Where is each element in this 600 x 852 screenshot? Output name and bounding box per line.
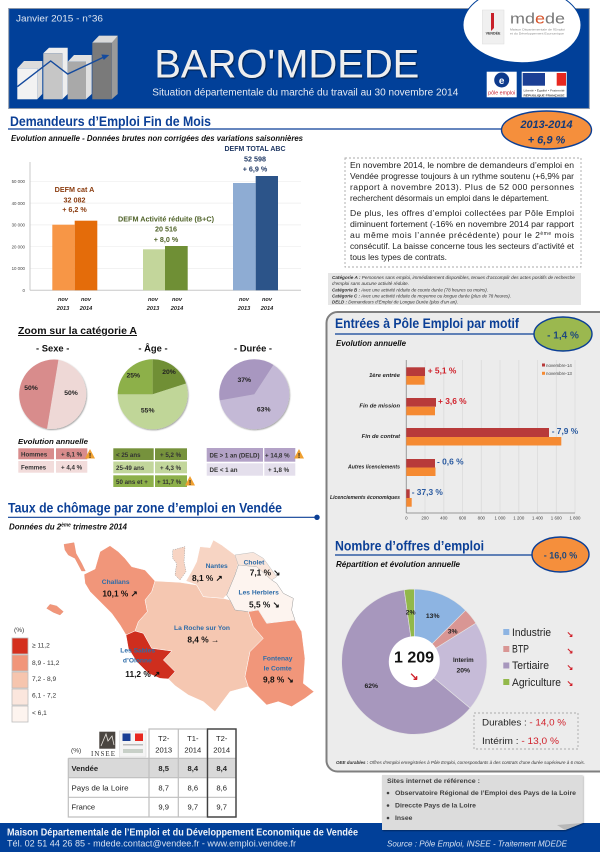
text box: commentary: au même mois l’année précédente) pour le 2: [350, 230, 540, 240]
pie: duree: 37%: [237, 377, 251, 384]
table: national comparison: 8,7: [158, 783, 169, 792]
bar chart: DEFM: nov: [239, 297, 250, 303]
bar chart: entrees par motif: - 7,9 %: [552, 426, 579, 436]
region: Challans: Challans: [102, 579, 130, 586]
panel: sites internet: Direccte Pays de la Loire: [395, 803, 476, 810]
label: DEFM activite reduite: DEFM Activité réduite (B+C): [118, 215, 215, 224]
label: DEFM cat A: 32 082: [64, 195, 85, 204]
callout: 2013-2014 +6,9 %: + 6,9 %: [528, 134, 566, 146]
bar chart: entrees par motif: Licenciements économiques: [330, 495, 401, 501]
region: La Roche sur Yon: 8,4 % →: [187, 634, 219, 644]
bar chart: entrees par motif: 600: [459, 516, 467, 520]
panel: sites internet: [382, 775, 583, 830]
table: national comparison: 9,9: [158, 803, 169, 812]
table: age evolution: + 5,2 %: [160, 452, 182, 459]
label: DEFM activite reduite: + 8,0 %: [154, 235, 179, 244]
callout: 2013-2014 +6,9 %: 2013-2014: [520, 119, 572, 131]
bar chart: entrees par motif: + 3,6 %: [438, 396, 467, 406]
table: duree evolution: DE < 1 an: [210, 467, 238, 474]
donut chart: offres: [342, 589, 487, 734]
legend: secteurs: Tertiaire: [512, 660, 549, 672]
region: Fontenay le Comte: le Comte: [264, 666, 292, 673]
bar chart: entrees par motif: - 37,3 %: [412, 487, 443, 497]
donut chart: offres: 2%: [406, 610, 416, 617]
heading: entrees pole emploi: Entrées à Pôle Emploi par motif: [335, 316, 519, 331]
table: duree evolution: DE > 1 an (DELD): [210, 452, 260, 459]
region: Challans: 10,1 % ↗: [102, 589, 138, 599]
bar chart: DEFM: nov: [81, 297, 92, 303]
map legend: 8,9 - 11,2: [32, 660, 60, 667]
bar chart: entrees par motif: 0: [405, 516, 408, 520]
callout: 2013-2014 +6,9 %: [502, 111, 592, 149]
region: Fontenay le Comte: 9,8 % ↘: [263, 675, 294, 685]
bar chart: DEFM: 30 000: [12, 222, 26, 228]
pie: duree: - Durée -: [234, 343, 272, 354]
label: evolution annuelle: Evolution annuelle: [18, 437, 89, 446]
bar chart: DEFM: 40 000: [12, 201, 26, 206]
logo: mdede oval: et du Développement Economique: [510, 31, 564, 35]
table: national comparison: France: [72, 803, 95, 812]
pie: sexe: - Sexe -: [36, 343, 69, 354]
table: national comparison: Pays de la Loire: [72, 783, 128, 792]
bar chart: DEFM: 2014: [170, 306, 184, 312]
callout: -1,4 %: [534, 317, 592, 351]
heading: taux de chomage: Taux de chômage par zone d’emploi en Vendée: [8, 500, 282, 515]
bar chart: entrees par motif: 200: [421, 516, 429, 520]
subheading: Evolution annuelle - Données brutes non corrigées des variations saisonnières: [11, 133, 303, 143]
heading: offres d'emploi: Nombre d’offres d’emploi: [335, 539, 484, 554]
text box: commentary: [345, 158, 581, 267]
bar chart: entrees par motif: Fin de mission: [359, 404, 400, 410]
pie: sexe: 50%: [24, 385, 38, 392]
definitions box: d’emploi sans aucune activité réduite.: [332, 281, 409, 286]
table: national comparison: 8,4: [188, 764, 199, 773]
logo: pole emploi: pôle emploi: [488, 91, 515, 97]
text box: commentary: mois: [552, 230, 574, 240]
table: age evolution: 50 ans et +: [116, 479, 148, 486]
bar chart: DEFM: 2013: [237, 306, 251, 312]
definitions box: Catégorie C : Avec une activité réduite de moyenne ou longue durée (plus de 78 heures).: [332, 294, 511, 298]
donut chart: offres: 3%: [448, 628, 458, 635]
logo: mdede oval: VENDÉE: [486, 30, 501, 35]
note: OEE durables: OEE durables : Offres d’emploi enregistrées à Pôle Emploi, correspondants à des contrats d’une durée supérieure à 6 mois.: [336, 760, 585, 765]
text box: commentary: En novembre 2014, le nombre de demandeurs d’emploi en: [350, 160, 574, 170]
subtitle: Situation départementale du marché du travail au 30 novembre 2014: [152, 88, 459, 99]
bar chart: DEFM: [12, 144, 301, 312]
table: national comparison: 8,5: [158, 764, 170, 773]
bar chart: DEFM: 20 000: [12, 244, 26, 250]
pie: age: 20%: [162, 369, 176, 376]
table: sexe evolution: Femmes: [21, 464, 47, 472]
definitions box: Catégorie A : Personnes sans emploi, immédiatement disponibles, tenues d’accomplir des actes positifs de recherche: [332, 275, 575, 280]
table: age evolution: 25-49 ans: [116, 465, 145, 472]
bar chart: entrees par motif: 1 400: [532, 516, 544, 520]
panel: right background: [326, 312, 600, 772]
bar chart: DEFM: nov: [262, 297, 273, 303]
label: DEFM activite reduite: 20 516: [155, 225, 177, 234]
definitions box: DELD : Demandeurs d’Emploi de Longue Durée (plus d’un an).: [332, 300, 458, 304]
callout: durables interim: [474, 713, 578, 749]
table: national comparison: (%): [71, 748, 81, 755]
icon: warning: !: [298, 453, 300, 460]
bar chart: DEFM: 10 000: [12, 266, 26, 271]
pie: duree: [219, 343, 289, 429]
text box: commentary: Vendée progresse toujours à un rythme soutenu (+6,9% par: [350, 171, 574, 181]
map legend: 6,1 - 7,2: [32, 692, 57, 700]
pie: age: [118, 343, 188, 429]
callout: durables interim: Intérim : - 13,0 %: [482, 736, 559, 747]
bar chart: entrees par motif: 1 600: [551, 516, 562, 520]
bar chart: entrees par motif: + 5,1 %: [428, 365, 457, 375]
region: iles: [47, 543, 85, 615]
donut chart: offres: 1 209: [394, 650, 434, 667]
legend: secteurs: ↘: [567, 630, 573, 639]
title: BARO'MDEDE: [154, 42, 419, 86]
icon: warning: !: [189, 480, 191, 487]
subheading: trimestre: ème: [61, 523, 71, 529]
bar chart: entrees par motif: Autres licenciements: [347, 464, 401, 470]
bar chart: entrees par motif: [330, 360, 581, 520]
region: Les Sables d'Olonne: 11,2 % ↗: [125, 669, 160, 679]
table: national comparison: 9,7: [216, 803, 227, 812]
heading: demandeurs d'emploi: Demandeurs d’Emploi Fin de Mois: [10, 114, 211, 129]
bar chart: entrees par motif: 1 800: [570, 516, 581, 520]
legend: secteurs: Industrie: [512, 627, 551, 639]
callout: -1,4 %: - 1,4 %: [547, 330, 579, 342]
bar chart: entrees par motif: 800: [478, 516, 486, 520]
map legend: ≥ 11,2: [32, 643, 50, 650]
legend: secteurs: ↘: [567, 679, 573, 688]
subheading: trimestre: Données du 2: [9, 522, 64, 532]
region: Nantes: Nantes: [206, 563, 228, 570]
logo: mdede oval: mdede: [510, 10, 565, 27]
region: Les Herbiers: Les Herbiers: [239, 589, 279, 596]
icon: rising bar chart: [17, 36, 118, 99]
text box: commentary: consécutif. La baisse concerne tous les secteurs d’activité et: [350, 241, 575, 251]
footer band: Tél. 02 51 44 26 85 - mdede.contact@vendee.fr - www.emploi.vendee.fr: [7, 838, 296, 848]
pie: duree: 63%: [257, 406, 271, 413]
table: sexe evolution: + 8,1 %: [61, 452, 83, 458]
footer band: [0, 823, 600, 852]
table: duree evolution: + 14,8 %: [265, 452, 290, 459]
table: national comparison: 8,6: [216, 783, 227, 792]
table: national comparison: 2013: [155, 745, 172, 754]
bar chart: DEFM: nov: [172, 297, 183, 303]
text box: commentary: rapport à novembre 2013). Plus de 52 000 personnes: [350, 182, 574, 192]
table: age evolution: + 4,3 %: [160, 465, 182, 472]
donut chart: offres: 62%: [364, 683, 378, 690]
subheading: trimestre: trimestre 2014: [71, 522, 127, 532]
bar chart: DEFM: nov: [58, 297, 69, 303]
bar chart: DEFM: 0: [23, 288, 26, 293]
region: Challans: [84, 546, 155, 635]
text box: commentary: diminuent fortement (-16% en novembre 2014 par rapport: [350, 219, 575, 229]
label: DEFM total: + 6,9 %: [243, 164, 268, 174]
bar chart: entrees par motif: 1 000: [494, 516, 506, 520]
logo: INSEE: [91, 732, 115, 758]
legend: secteurs: ↘: [567, 646, 573, 656]
bar chart: DEFM: 2014: [79, 306, 93, 312]
logo: republique francaise: Liberté • Égalité • Fraternité: [524, 88, 565, 93]
bar chart: DEFM: 2013: [146, 306, 160, 312]
legend: secteurs: BTP: [512, 644, 529, 656]
bar chart: entrees par motif: Fin de contrat: [362, 434, 401, 440]
logo: INSEE: INSEE: [91, 750, 115, 758]
label: DEFM activite reduite: [118, 215, 215, 244]
pie: sexe: 50%: [64, 390, 78, 397]
panel: sites internet: Insee: [395, 815, 413, 822]
chart legend: [542, 363, 572, 376]
bar chart: DEFM: 2014: [260, 306, 274, 312]
table: national comparison: 2014: [213, 745, 230, 754]
table: national comparison: Vendée: [72, 764, 98, 773]
region: Cholet: [235, 552, 280, 580]
region: Les Sables d'Olonne: d’Olonne: [123, 658, 152, 665]
map: Vendee: [47, 540, 314, 712]
table: sexe evolution: + 4,4 %: [61, 464, 83, 472]
table: national comparison: 2014: [184, 745, 201, 754]
table: sexe evolution: Hommes: [21, 452, 48, 458]
label: DEFM total: [224, 144, 286, 174]
heading: zoom categorie A: Zoom sur la catégorie A: [18, 326, 137, 337]
logo: marianne: [119, 731, 146, 757]
table: national comparison: 8,6: [188, 783, 198, 792]
pie: age: 55%: [141, 407, 155, 414]
map legend: [12, 627, 60, 722]
footer band: Source : Pôle Emploi, INSEE - Traitement MDEDE: [387, 839, 567, 849]
logo: republique francaise: RÉPUBLIQUE FRANÇAISE: [524, 92, 564, 98]
pie: age: 25%: [126, 373, 140, 380]
bar chart: DEFM: 2013: [56, 306, 70, 312]
text box: commentary: tous les types de contrats.: [350, 252, 447, 262]
icon: warning: !: [89, 453, 91, 460]
region: Fontenay le Comte: [245, 610, 314, 707]
footer band: Maison Départementale de l’Emploi et du Développement Economique de Vendée: [7, 828, 358, 839]
bar chart: entrees par motif: 1 200: [513, 516, 525, 520]
table: duree evolution: + 1,8 %: [268, 467, 290, 474]
panel: sites internet: Observatoire Régional de l’Emploi des Pays de la Loire: [395, 790, 576, 797]
table: national comparison: 9,7: [188, 803, 198, 812]
text box: commentary: De plus, les offres d’emploi collectées par Pôle Emploi: [350, 208, 574, 218]
donut chart: offres: 20%: [456, 668, 470, 675]
logo: mdede oval: [463, 0, 581, 63]
region: Les Herbiers: [227, 565, 295, 623]
definitions box: Catégorie B : Avec une activité réduite de courte durée (78 heures ou moins).: [332, 288, 488, 292]
subheading: repartition: Répartition et évolution annuelle: [336, 559, 460, 569]
bar chart: entrees par motif: 1ère entrée: [369, 373, 401, 379]
legend: secteurs: [503, 627, 573, 689]
bar chart: DEFM: 50 000: [12, 179, 26, 184]
label: DEFM total: DEFM TOTAL ABC: [224, 144, 286, 153]
text box: commentary: ème: [540, 231, 551, 237]
label: DEFM cat A: + 6,2 %: [62, 205, 87, 214]
icon: down arrow: ↘: [409, 671, 419, 683]
pie: age: - Âge -: [138, 343, 168, 354]
table: national comparison: T2-: [158, 734, 170, 743]
region: Fontenay le Comte: Fontenay: [263, 656, 293, 663]
donut chart: offres: Interim: [453, 657, 474, 664]
region: Les Sables d'Olonne: Les Sables: [120, 648, 155, 655]
table: age evolution: < 25 ans: [116, 452, 141, 459]
table: age evolution: + 11,7 %: [157, 479, 182, 486]
region: Les Sables d'Olonne: [120, 631, 175, 679]
bar chart: entrees par motif: 400: [440, 516, 448, 520]
table: national comparison: [68, 729, 236, 817]
chart legend: novembre-14: [546, 363, 572, 368]
label: DEFM cat A: DEFM cat A: [55, 185, 94, 194]
region: Cholet: Cholet: [244, 560, 265, 567]
issue date: Janvier 2015 - n°36: [16, 14, 103, 25]
legend: secteurs: Agriculture: [512, 677, 561, 689]
logo: pole emploi: [487, 72, 517, 97]
table: national comparison: T2-: [216, 734, 228, 743]
label: DEFM cat A: [55, 185, 94, 214]
pie: sexe: [19, 343, 86, 429]
callout: -16,0 %: [532, 537, 589, 572]
logo: pole emploi: e: [499, 76, 505, 87]
table: sexe evolution: [18, 448, 95, 473]
text box: commentary: recherchent désormais un emploi dans le département.: [350, 193, 549, 203]
region: Les Herbiers: 5,5 % ↘: [249, 599, 280, 609]
subheading: evolution annuelle: Evolution annuelle: [336, 338, 406, 348]
table: national comparison: 8,4: [216, 764, 228, 773]
legend: secteurs: ↘: [567, 663, 573, 672]
callout: -16,0 %: - 16,0 %: [544, 550, 577, 560]
map legend: < 6,1: [32, 710, 47, 717]
logo: republique francaise: [522, 72, 567, 98]
chart legend: novembre-13: [546, 371, 572, 376]
table: age evolution: [113, 448, 195, 487]
region: Nantes: [173, 540, 238, 598]
region: Nantes: 8,1 % ↗: [192, 573, 223, 583]
bar chart: DEFM: nov: [148, 297, 159, 303]
region: Cholet: 7,1 % ↘: [250, 568, 280, 578]
donut chart: offres: 13%: [426, 613, 440, 620]
map legend: (%): [14, 627, 24, 634]
region: La Roche sur Yon: La Roche sur Yon: [174, 625, 230, 632]
table: national comparison: T1-: [187, 734, 199, 743]
callout: durables interim: Durables : - 14,0 %: [482, 718, 566, 729]
header banner: [9, 0, 589, 108]
panel: sites internet: Sites internet de référence :: [387, 778, 480, 785]
label: DEFM total: 52 598: [244, 154, 266, 164]
bar chart: entrees par motif: - 0,6 %: [437, 456, 464, 466]
table: duree evolution: [207, 448, 304, 476]
region: La Roche sur Yon: [135, 581, 263, 712]
definitions box: [328, 273, 581, 305]
logo: mdede oval: Maison Départementale de l'Emploi: [510, 28, 565, 32]
map legend: 7,2 - 8,9: [32, 676, 57, 683]
